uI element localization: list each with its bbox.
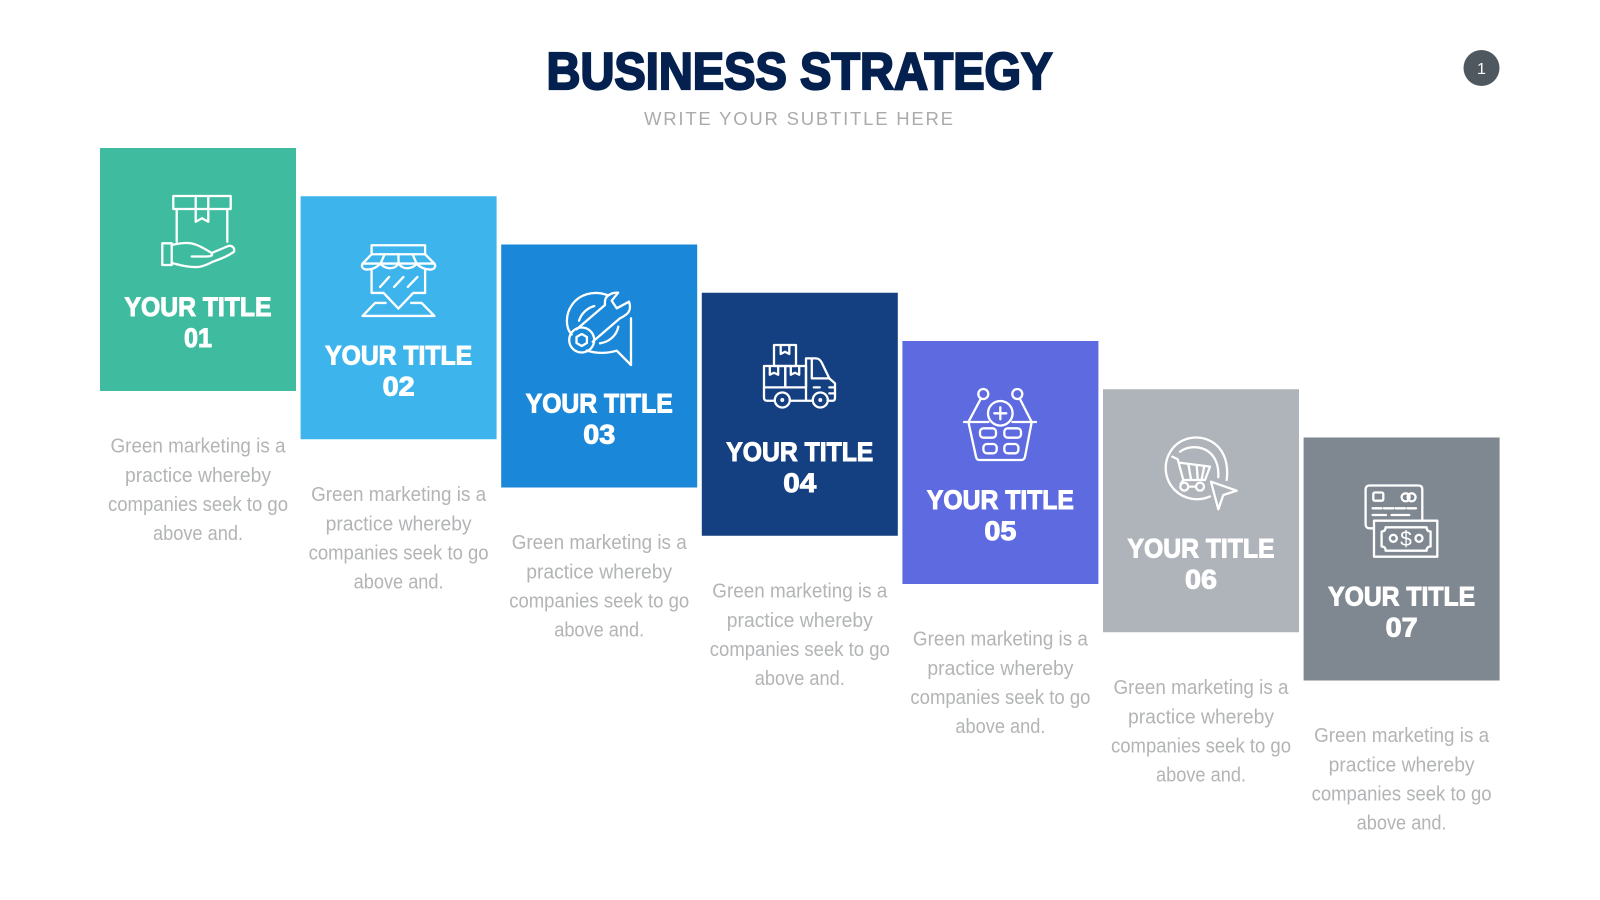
panel: step 01: practice whereby <box>125 465 271 487</box>
icon: box on open hand <box>162 196 234 267</box>
subtitle: WRITE YOUR SUBTITLE HERE <box>644 108 953 129</box>
panel: step 04: above and. <box>755 668 845 690</box>
panel: step 02: above and. <box>354 571 444 593</box>
panel: step 01: Green marketing is a <box>110 436 286 458</box>
panel: step 06 <box>1103 389 1299 786</box>
page number badge: 1 <box>1477 61 1486 78</box>
panel: step 04: practice whereby <box>727 610 873 632</box>
panel: step 04: Green marketing is a <box>712 580 888 602</box>
panel: step 06: companies seek to go <box>1111 735 1291 757</box>
panel: step 06: 06 <box>1185 564 1217 594</box>
title: BUSINESS STRATEGY <box>546 43 1052 101</box>
panel: step 04 <box>702 293 898 690</box>
panel: step 02: YOUR TITLE <box>325 340 472 370</box>
panel: step 05: above and. <box>955 716 1045 738</box>
icon: delivery truck with boxes <box>764 345 835 408</box>
panel: step 02: 02 <box>383 371 415 401</box>
panel: step 07: Green marketing is a <box>1314 725 1490 747</box>
panel: step 02: Green marketing is a <box>311 484 487 506</box>
panel: step 01: companies seek to go <box>108 494 288 516</box>
panel: step 04: 04 <box>783 468 816 498</box>
icon: storefront pin <box>362 245 435 316</box>
icon: online cart with cursor <box>1166 438 1237 509</box>
panel: step 06: above and. <box>1156 764 1246 786</box>
panel: step 03: Green marketing is a <box>512 532 688 554</box>
panel: step 07: companies seek to go <box>1312 784 1492 806</box>
panel: step 03: 03 <box>583 420 615 450</box>
icon: credit card and banknote <box>1366 486 1437 557</box>
panel: step 03: above and. <box>554 620 644 642</box>
panel: step 02: companies seek to go <box>309 542 489 564</box>
icon: shopping basket with plus <box>964 389 1036 460</box>
panel: step 05: YOUR TITLE <box>927 485 1074 515</box>
panel: step 01 <box>100 148 296 545</box>
panel: step 07: YOUR TITLE <box>1328 582 1475 612</box>
panel: step 04: YOUR TITLE <box>726 437 873 467</box>
panel: step 07: above and. <box>1357 812 1447 834</box>
panel: step 07 <box>1304 438 1500 834</box>
panel: step 04: companies seek to go <box>710 639 890 661</box>
panel: step 01: above and. <box>153 523 243 545</box>
page number badge <box>1464 50 1500 86</box>
panel: step 01: 01 <box>184 323 212 353</box>
panel: step 05: Green marketing is a <box>913 628 1089 650</box>
panel: step 06: practice whereby <box>1128 706 1274 728</box>
panel: step 03: companies seek to go <box>509 590 689 612</box>
panel: step 01: YOUR TITLE <box>124 292 272 322</box>
panel: step 05: 05 <box>984 516 1016 546</box>
panel: step 02: practice whereby <box>326 513 472 535</box>
panel: step 03: practice whereby <box>526 562 672 584</box>
panel: step 05: practice whereby <box>927 658 1073 680</box>
panel: step 05: companies seek to go <box>910 687 1090 709</box>
panel: step 06: YOUR TITLE <box>1128 533 1274 563</box>
panel: step 02 <box>301 196 497 593</box>
panel: step 03 <box>501 244 697 642</box>
panel: step 07: practice whereby <box>1329 754 1475 776</box>
panel: step 05 <box>902 341 1098 738</box>
panel: step 07: 07 <box>1386 612 1418 642</box>
panel: step 03: YOUR TITLE <box>526 388 673 418</box>
icon: wrench speech bubble <box>567 293 631 365</box>
icon: dollar sign: $ <box>1400 528 1412 551</box>
panel: step 06: Green marketing is a <box>1114 677 1289 699</box>
